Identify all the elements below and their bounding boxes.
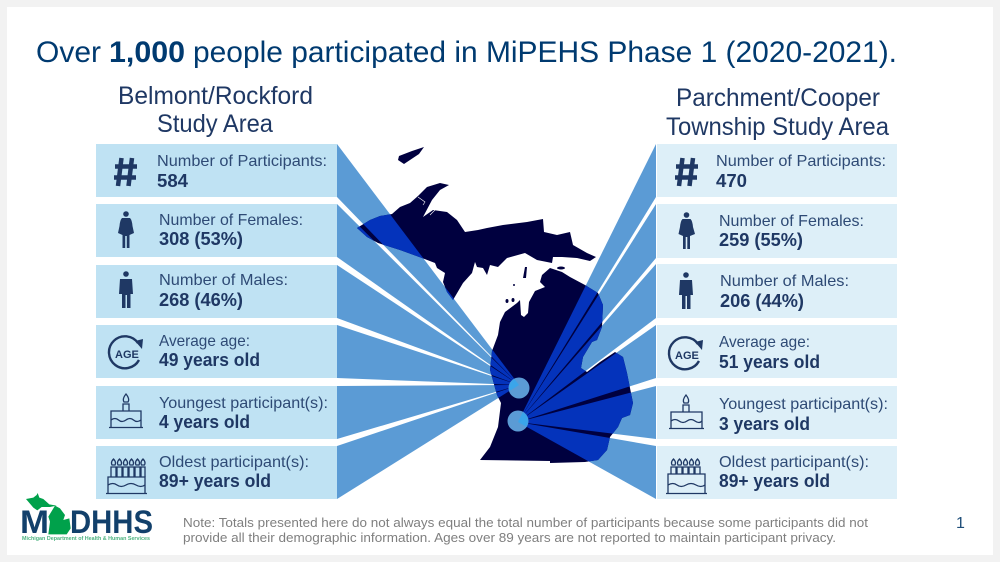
row: youngest participant [96,386,337,439]
row: average age: Average age: [159,333,250,350]
row: number of females [96,204,337,257]
row: oldest participant: 89+ years old [719,471,830,491]
row: average age: Average age: [719,334,810,351]
row: number of males [657,264,897,318]
row: number of participants: 470 [716,171,747,191]
heading: Parchment/Cooper township study area [666,84,889,141]
heading: Belmont/Rockford study area [118,82,313,138]
row: number of participants: Number of Participants: [716,153,886,170]
row: average age: 49 years old [159,350,260,370]
beams overlapping the map [357,214,633,462]
row: number of males: 268 (46%) [159,290,243,310]
row: number of males [96,265,337,318]
row: average age [96,325,337,378]
beams: right study area [518,144,656,499]
logo: MDHHS: M [20,504,49,540]
heading: Belmont/Rockford study area: Study Area [157,110,273,138]
page number: 1 [956,515,965,532]
row: oldest participant: 89+ years old [159,471,271,491]
logo: MDHHS: Michigan Department of Health & Human Services [22,536,150,542]
row: youngest participant: 4 years old [159,412,250,432]
marker: Parchment/Cooper [508,410,528,432]
footnote: provide all their demographic information. Ages over 89 years are not reported to maintain participant privacy. [183,531,836,545]
row: number of males: 206 (44%) [720,291,804,311]
row: youngest participant: Youngest participant(s): [719,396,888,413]
heading: Belmont/Rockford study area: Belmont/Rockford [118,82,313,110]
beams: left study area [337,144,519,499]
row: number of females: Number of Females: [719,213,864,230]
row: number of females: 259 (55%) [719,230,803,250]
row: oldest participant [96,446,337,499]
row: number of females: Number of Females: [159,212,303,229]
logo: MDHHS [20,493,153,542]
row: average age: AGE [115,349,139,361]
row: number of participants [96,144,337,197]
row: youngest participant [657,386,897,439]
row: number of participants [657,144,897,197]
row: number of males: Number of Males: [720,273,849,290]
marker: Belmont/Rockford [508,378,530,398]
heading: Parchment/Cooper township study area: Township Study Area [666,113,889,141]
row: youngest participant: Youngest participant(s): [159,395,328,412]
row: number of participants: 584 [157,171,188,191]
title: people participated in MiPEHS Phase 1 (2020-2021). [193,36,897,69]
footnote [183,516,869,545]
row: number of participants: Number of Participants: [157,153,327,170]
heading: Parchment/Cooper township study area: Parchment/Cooper [676,84,880,112]
row: average age [657,325,897,378]
map of Michigan [357,147,633,463]
row: oldest participant: Oldest participant(s): [159,454,309,471]
row: number of males: Number of Males: [159,272,288,289]
panel: Parchment/Cooper statistics [657,144,897,499]
title: 1,000 [109,36,185,69]
row: number of females: 308 (53%) [159,229,243,249]
row: oldest participant: Oldest participant(s): [719,454,869,471]
row: average age: AGE [675,350,699,362]
row: number of females [657,204,897,258]
logo: MDHHS: DHHS [70,504,153,540]
panel: Belmont/Rockford statistics [96,144,337,499]
title: Over [36,36,101,69]
row: oldest participant [657,446,897,499]
row: youngest participant: 3 years old [719,414,810,434]
footnote: Note: Totals presented here do not always equal the total number of participants because some participants did not [183,516,869,530]
row: average age: 51 years old [719,352,820,372]
